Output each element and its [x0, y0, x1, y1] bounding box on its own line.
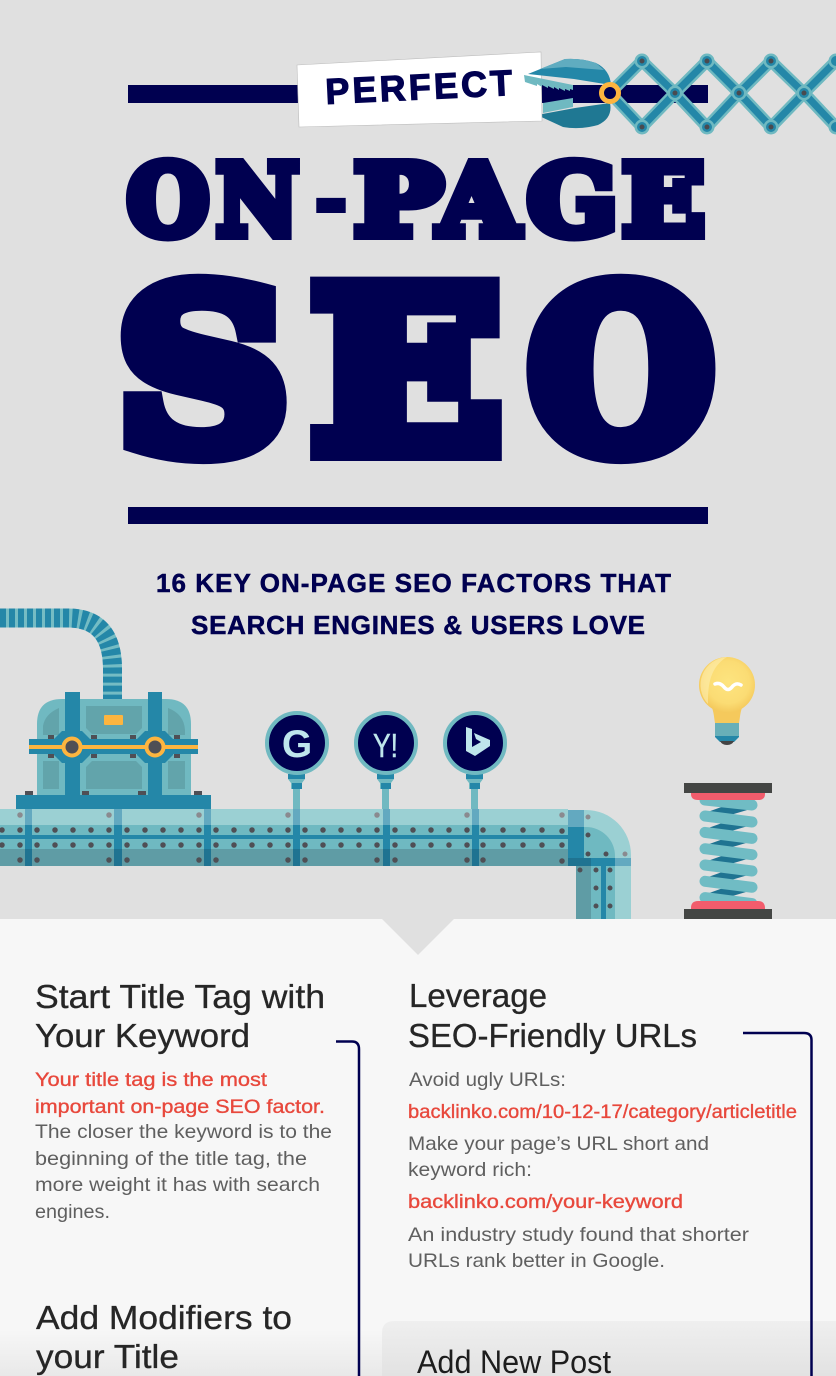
top rule — [128, 85, 708, 103]
text block: title tag: beginning of the title tag, the — [35, 1148, 307, 1170]
icon: spring — [684, 783, 772, 919]
bottom fade — [0, 1330, 382, 1376]
horizontal pipe — [0, 809, 631, 919]
heading: add modifiers — [36, 1299, 292, 1375]
text block: urls — [408, 1069, 797, 1272]
panel: add new post — [382, 1321, 836, 1376]
text block: title tag: The closer the keyword is to the — [35, 1121, 332, 1143]
text block: title tag — [35, 1069, 332, 1223]
machine — [16, 692, 211, 809]
title: on-page: E — [622, 144, 704, 258]
icon: hose — [0, 618, 112, 699]
subtitle: 16 KEY ON-PAGE SEO FACTORS THAT — [156, 568, 671, 598]
heading: start title tag: Your Keyword — [35, 1017, 250, 1054]
text block: urls: Avoid ugly URLs: — [409, 1069, 566, 1091]
text block: title tag: important on-page SEO factor. — [35, 1096, 325, 1118]
icon: google gauge: G — [282, 723, 312, 766]
heading: leverage urls: Leverage — [409, 977, 547, 1014]
connector line left — [336, 1042, 359, 1376]
title: on-page: P — [354, 144, 442, 258]
icon: yahoo gauge — [356, 713, 416, 809]
bottom rule — [128, 507, 708, 524]
heading: add modifiers: Add Modifiers to — [36, 1299, 292, 1336]
heading: leverage urls: SEO-Friendly URLs — [408, 1017, 697, 1054]
label: perfect — [297, 52, 542, 127]
text block: title tag: Your title tag is the most — [35, 1069, 268, 1091]
text block: urls: backlinko.com/10-12-17/category/articletitle — [408, 1101, 797, 1123]
title: on-page: G — [528, 144, 618, 258]
text block: urls: Make your page’s URL short and — [408, 1133, 709, 1155]
text block: urls: An industry study found that shorter — [408, 1224, 750, 1246]
title: on-page: A — [437, 144, 520, 258]
heading: leverage urls — [408, 977, 697, 1054]
icon: yahoo gauge: Y! — [373, 727, 398, 764]
title: seo: E — [312, 242, 501, 501]
text block: urls: backlinko.com/your-keyword — [408, 1191, 683, 1213]
heading: add modifiers: your Title — [36, 1338, 179, 1375]
icon: upper claw jaw — [524, 59, 618, 113]
heading: start title tag — [35, 978, 325, 1054]
title: on-page: O — [127, 144, 209, 258]
icon: google gauge — [267, 713, 327, 809]
subtitle — [156, 568, 671, 640]
pipe elbow — [568, 810, 631, 919]
text block: urls: keyword rich: — [408, 1159, 532, 1181]
icon: bing gauge — [445, 713, 505, 809]
icon: light bulb — [699, 657, 755, 745]
text block: title tag: engines. — [35, 1201, 110, 1223]
subtitle: SEARCH ENGINES & USERS LOVE — [191, 610, 645, 640]
content panel — [0, 919, 836, 1376]
text block: urls: URLs rank better in Google. — [408, 1250, 665, 1272]
title: seo: S — [118, 242, 288, 501]
title: seo: O — [529, 242, 713, 501]
text block: title tag: more weight it has with search — [35, 1174, 320, 1196]
icon: lower claw jaw — [537, 103, 610, 128]
title: on-page — [127, 144, 705, 258]
title: on-page: - — [313, 144, 349, 252]
label: perfect: PERFECT — [324, 62, 513, 112]
icon: extending scissor arm — [610, 61, 836, 127]
connector line right — [743, 1033, 812, 1376]
heading: start title tag: Start Title Tag with — [35, 978, 325, 1015]
title: seo — [118, 242, 713, 501]
title: on-page: N — [216, 144, 298, 258]
